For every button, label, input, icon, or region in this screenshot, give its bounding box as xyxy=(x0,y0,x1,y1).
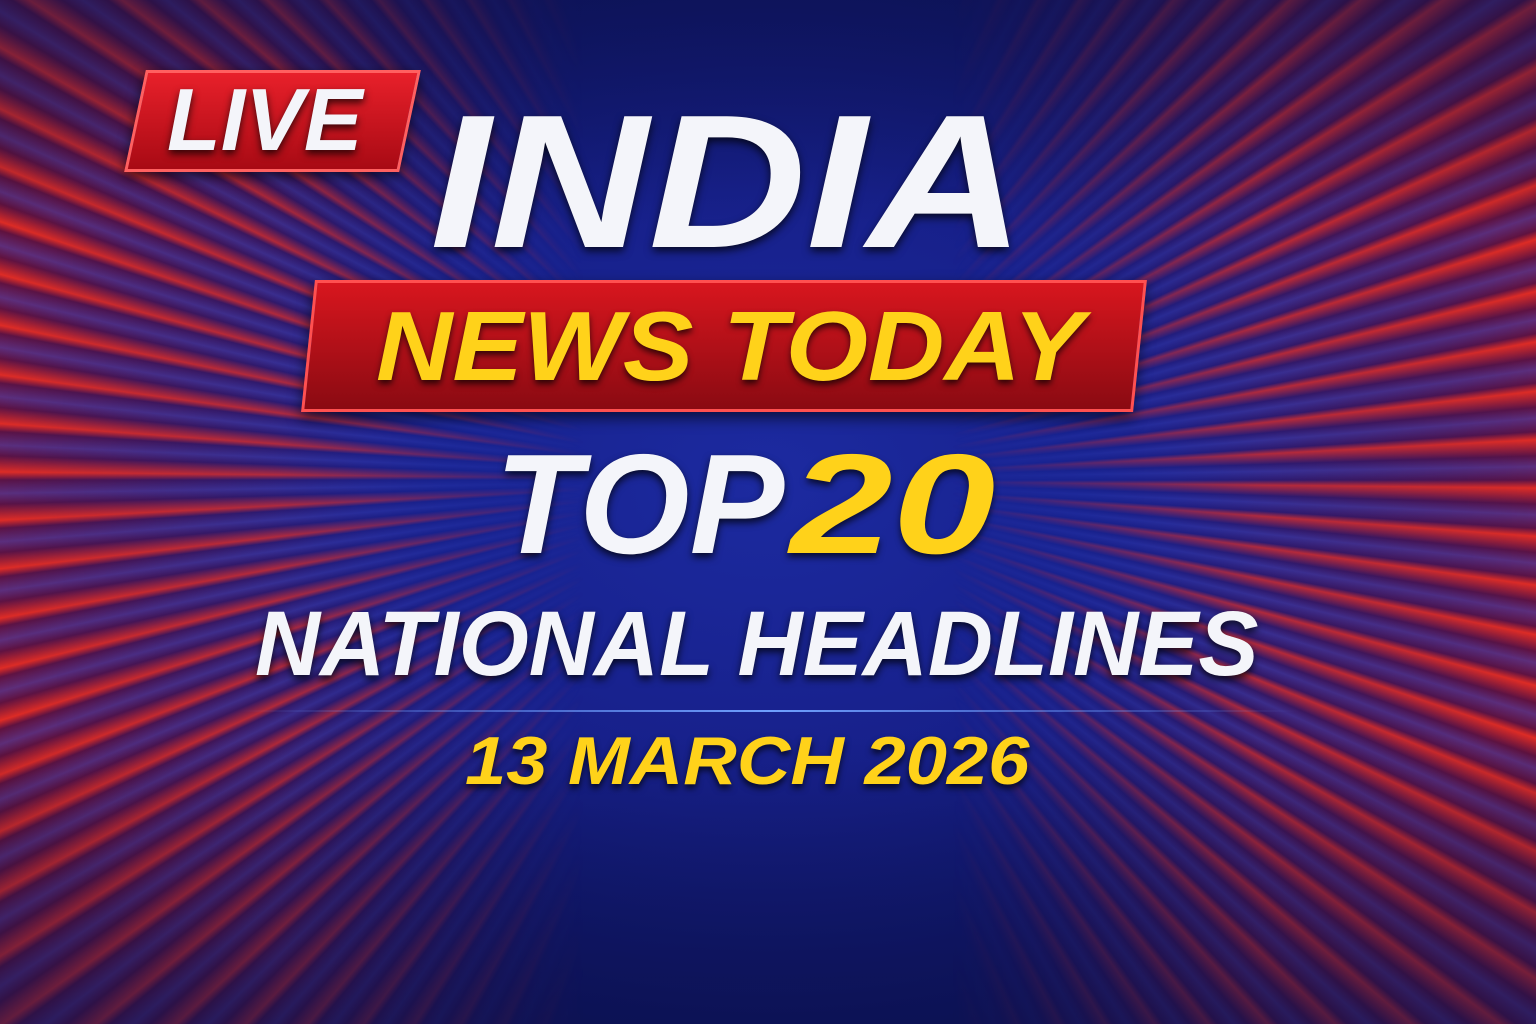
heading: top 20 xyxy=(495,425,998,584)
live badge xyxy=(117,66,424,184)
heading: national headlines: NATIONAL HEADLINES xyxy=(255,593,1258,695)
news today text: NEWS TODAY xyxy=(376,291,1084,401)
live text: LIVE xyxy=(167,70,363,169)
number 20: 20 xyxy=(790,425,995,584)
top text: TOP xyxy=(495,425,784,584)
banner: news today xyxy=(293,277,1154,427)
decorative glow line xyxy=(240,710,1300,712)
date: 13 MARCH 2026 xyxy=(465,723,1029,799)
title: INDIA: INDIA xyxy=(430,76,1025,288)
